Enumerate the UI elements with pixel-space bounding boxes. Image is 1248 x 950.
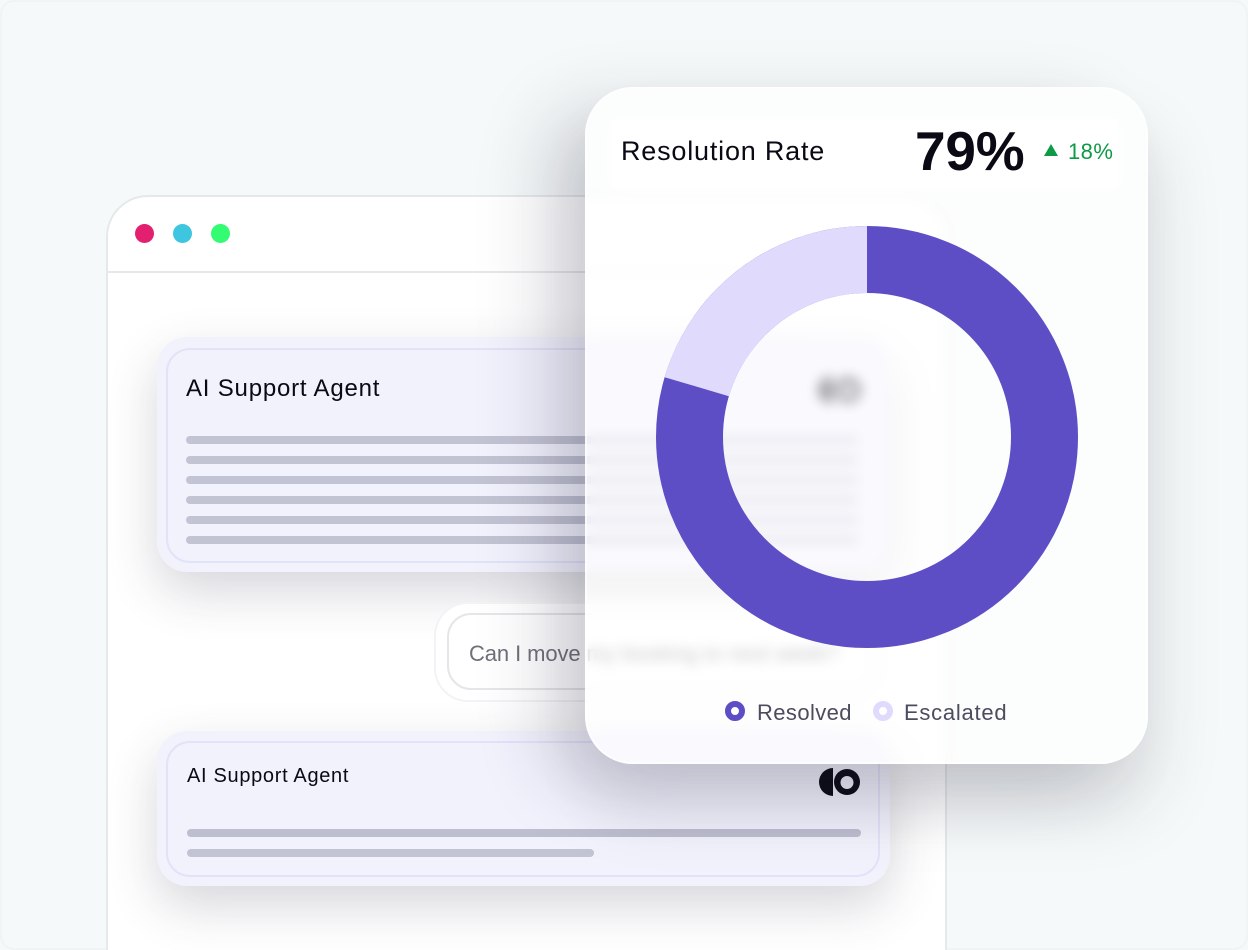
metric change: 18%: 18% [1068,139,1113,164]
donut slice: resolved [690,260,1044,614]
chart legend [725,700,1007,725]
legend label: escalated: Escalated [904,700,1007,725]
card header backdrop [612,120,1118,188]
legend marker: resolved [725,701,745,721]
user question text: Can I move my booking to next week? [469,641,838,666]
donut slice: escalated [697,260,867,387]
bubble inner outline [447,613,873,690]
panel: second AI agent message [157,731,890,886]
donut chart [656,226,1078,648]
text placeholder lines [186,436,848,544]
heading: AI Support Agent: AI Support Agent [187,765,349,787]
browser window [106,195,947,950]
chat bubble: user question [434,602,886,702]
window control: pink dot [135,224,154,243]
panel: first AI agent message [157,337,890,572]
window control: green dot [211,224,230,243]
metric: 79%: 79% [915,120,1024,182]
window title bar divider [108,271,945,273]
icon: agent logo [812,370,868,410]
panel: resolution rate glass card [585,87,1148,764]
icon: agent logo [819,768,860,796]
window control: blue dot [173,224,192,243]
heading: Resolution Rate: Resolution Rate [621,136,825,166]
text placeholder lines [187,829,861,857]
message inner outline [166,741,880,877]
icon: up arrow [1044,144,1058,156]
heading: AI Support Agent: AI Support Agent [186,375,380,402]
message inner outline [166,348,880,563]
legend label: resolved: Resolved [757,700,852,725]
legend marker: escalated [873,701,893,721]
